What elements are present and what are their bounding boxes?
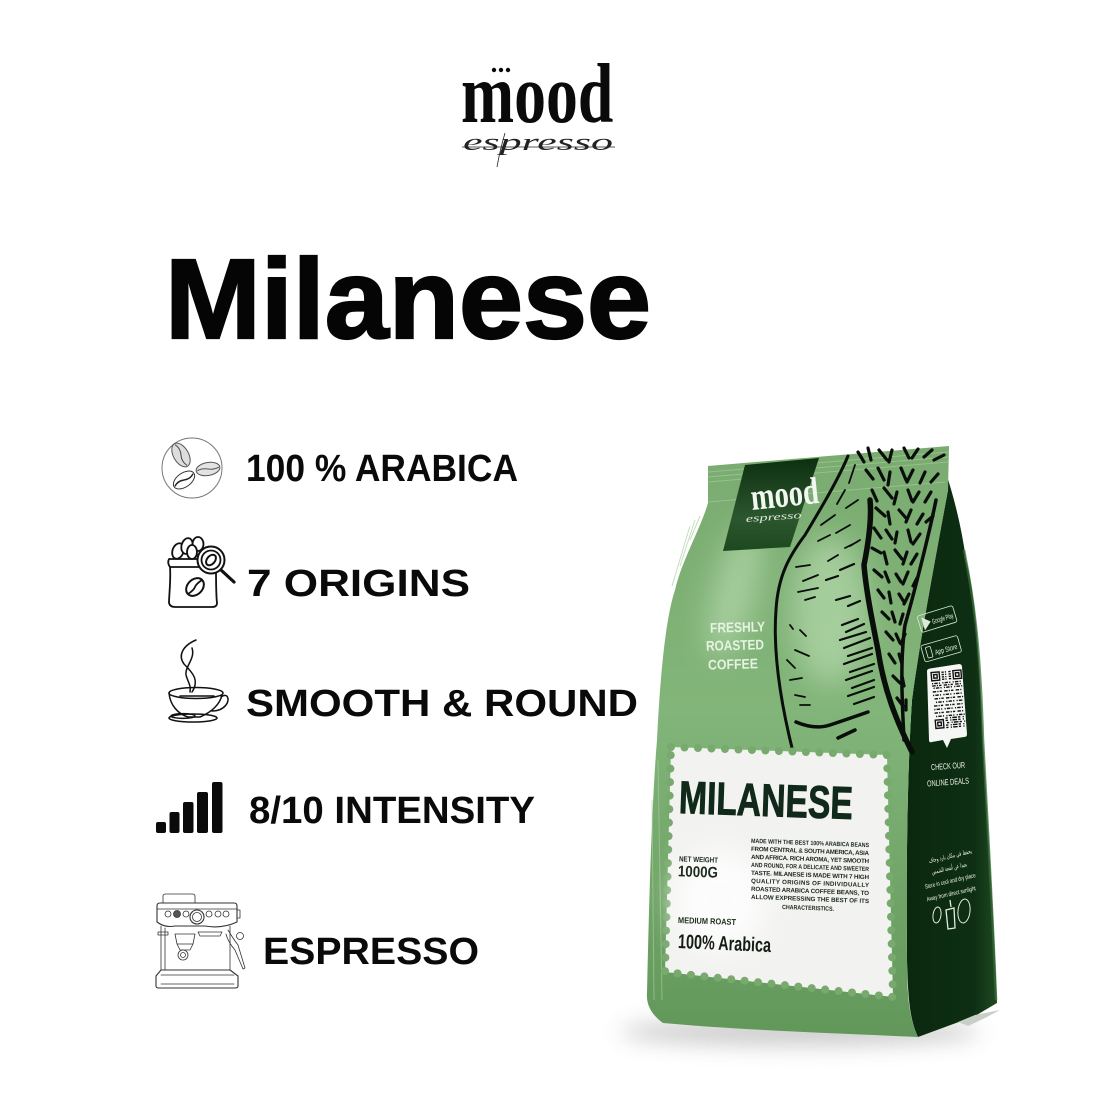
storage instructions: [924, 848, 977, 903]
storage instructions: Away from direct sunlight: [926, 885, 977, 903]
icon: espresso machine: [156, 894, 245, 988]
icon: intensity bars: [156, 782, 222, 833]
check our online deals: CHECK OUR: [931, 760, 965, 772]
logo: mood espresso: [461, 47, 615, 167]
product name: MILANESE: [678, 771, 854, 829]
logo patch: [723, 458, 819, 551]
freshly roasted coffee: COFFEE: [708, 655, 758, 673]
logo dots: [492, 68, 510, 72]
bean crease texture: [858, 448, 944, 710]
patch wordmark: mood: [749, 470, 821, 519]
bean crease lines: [864, 500, 912, 752]
bottom fold corner: [958, 1010, 1000, 1026]
medium roast: MEDIUM ROAST: [678, 915, 737, 927]
label description: FROM CENTRAL & SOUTH AMERICA, ASIA: [751, 846, 870, 857]
label description: TASTE. MILANESE IS MADE WITH 7 HIGH: [751, 870, 870, 881]
label description: [751, 838, 870, 913]
product bag: [620, 446, 1000, 1045]
top seal crimps: [652, 452, 948, 1000]
bean fine strokes: [787, 465, 860, 705]
label description: QUALITY ORIGINS OF INDIVIDUALLY: [751, 878, 870, 889]
bag front panel: [647, 446, 949, 1037]
icon: steaming cup: [169, 640, 228, 722]
net weight: [678, 854, 718, 882]
freshly roasted coffee: [706, 618, 766, 673]
label description: MADE WITH THE BEST 100% ARABICA BEANS: [751, 838, 869, 849]
check our online deals: [927, 760, 970, 788]
label: smooth and round: SMOOTH & ROUND: [246, 683, 638, 725]
logo wordmark: mood: [461, 47, 613, 141]
bean hatching: [826, 564, 874, 704]
bean right edge: [902, 500, 936, 740]
net weight caption: NET WEIGHT: [679, 854, 718, 865]
patch tagline: espresso: [745, 510, 802, 525]
label sheen: [675, 850, 765, 950]
bag side panel: [907, 470, 997, 1037]
qr modules: [931, 670, 966, 728]
label description: AND AFRICA. RICH AROMA, YET SMOOTH: [751, 854, 870, 865]
label: intensity: 8/10 INTENSITY: [249, 790, 535, 832]
qr card: [927, 664, 967, 748]
title: Milanese: [165, 236, 651, 362]
stamp edge scallops: [665, 747, 893, 997]
net weight value: 1000G: [678, 863, 718, 882]
recycling icons: [932, 898, 971, 929]
freshly roasted coffee: FRESHLY: [710, 618, 766, 636]
bag highlights: [696, 517, 868, 685]
patch logo: [745, 470, 821, 525]
storage instructions: بعيدا عن أشعة الشمس: [931, 859, 968, 876]
storage instructions: Store in cool and dry place: [924, 872, 977, 891]
label description: AND ROUND, FOR A DELICATE AND SWEETER: [751, 862, 870, 873]
bean outline: [775, 456, 848, 752]
label description: ALLOW EXPRESSING THE BEST OF ITS: [751, 894, 869, 905]
google play badge: Google Play: [931, 613, 955, 626]
icon: coffee sack with magnifier: [168, 537, 234, 607]
logo tagline: espresso: [463, 130, 613, 156]
freshly roasted coffee: ROASTED: [706, 636, 764, 654]
store badges: [917, 605, 962, 662]
icon: coffee beans in circle: [162, 438, 222, 498]
side panel edge highlight: [964, 550, 996, 1000]
white label: [665, 747, 893, 997]
logo tagline flourish: [462, 133, 615, 167]
storage instructions: يحفظ في مكان بارد وجاف: [928, 848, 973, 865]
label description: CHARACTERISTICS.: [782, 904, 834, 913]
qr code: [927, 664, 967, 748]
label card: [665, 747, 893, 997]
bean illustration: [775, 448, 944, 752]
check our online deals: ONLINE DEALS: [927, 776, 970, 788]
label: 100 % arabica: 100 % ARABICA: [246, 448, 518, 490]
label: 7 origins: 7 ORIGINS: [247, 563, 470, 605]
label description: ROASTED ARABICA COFFEE BEANS, TO: [751, 886, 869, 897]
bag shadow: [620, 1019, 980, 1045]
bean base strokes: [796, 712, 868, 738]
100% arabica: 100% Arabica: [678, 931, 772, 957]
label: espresso: ESPRESSO: [263, 931, 479, 973]
app store badge: App Store: [934, 642, 958, 657]
